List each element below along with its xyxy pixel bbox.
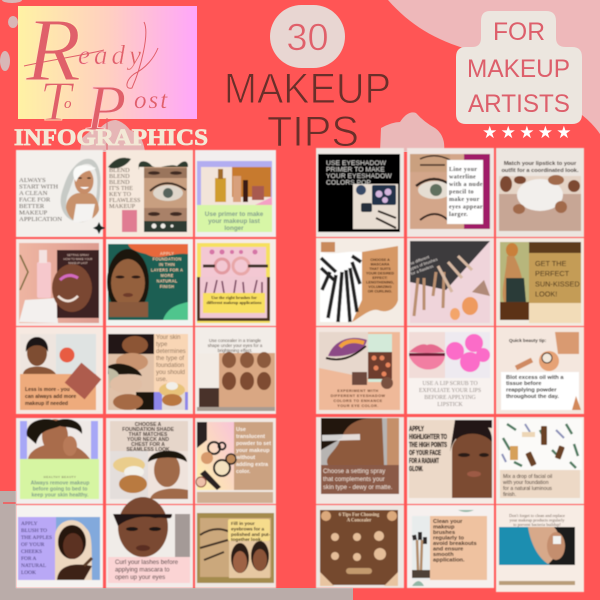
- text: CHOOSE A: [135, 422, 162, 428]
- text: BEFORE APPLYING: [424, 395, 476, 401]
- text: brushes: [433, 530, 455, 536]
- text: NATURAL: [21, 563, 46, 569]
- tip: concealer tips: [316, 505, 404, 588]
- text: LIPSTICK: [437, 402, 464, 408]
- rating stars: ★★★★★: [482, 123, 575, 143]
- text: CHOOSE A: [370, 258, 390, 262]
- text: APPLY: [409, 426, 424, 433]
- text: [156, 335, 186, 383]
- text: Curl your lashes before: [115, 559, 179, 566]
- text: Use primer to make: [205, 211, 264, 218]
- text: [409, 426, 447, 473]
- text: OF YOUR FACE: [409, 450, 441, 457]
- text: Use: [236, 427, 246, 433]
- text: [19, 177, 62, 223]
- text: color.: [236, 469, 251, 475]
- text: ALWAYS: [19, 177, 46, 184]
- text: throughout the day.: [506, 394, 559, 400]
- text: MORE: [160, 273, 174, 278]
- tip: setting spray type: [316, 417, 404, 504]
- text: A CLEAN: [19, 190, 48, 197]
- text: 6 Tips For Choosing: [339, 513, 380, 518]
- text: [31, 475, 89, 498]
- text: pencil to: [449, 190, 474, 196]
- text: APPLY: [21, 521, 38, 527]
- text: Use concealer in a triangle: [209, 338, 262, 343]
- text: outfit for a coordinated look.: [501, 168, 579, 174]
- text: [115, 559, 179, 581]
- text: the type of: [156, 356, 184, 362]
- text: SETTING SPRAY: [67, 253, 89, 257]
- tip: clean face: [16, 150, 105, 237]
- tip: lashes: [106, 497, 193, 588]
- text: BLEND: [109, 179, 130, 186]
- text: [331, 389, 385, 408]
- tip: clean brushes: [407, 505, 494, 588]
- text: FLAWLESS: [109, 197, 141, 204]
- text: OF YOUR: [21, 542, 45, 548]
- text: Quick beauty tip:: [509, 338, 547, 343]
- text: Choose a setting spray: [323, 468, 386, 475]
- text: before going to bed to: [33, 486, 87, 492]
- text: FOUNDATION SHADE: [122, 427, 175, 433]
- text: you should: [156, 370, 185, 376]
- text: your makeup products regularly: [509, 518, 565, 522]
- tip: sun-kissed: [496, 238, 584, 326]
- text: powder to set: [236, 441, 271, 447]
- text: to prevent bacteria buildup!: [513, 522, 561, 527]
- text: keep your skin healthy.: [32, 492, 89, 498]
- text: Clean your: [433, 519, 463, 525]
- tip: translucent powder: [195, 418, 276, 504]
- text: MAKEUP LAST: [68, 261, 88, 265]
- text: brightening effect.: [218, 348, 252, 353]
- text: eyebrows for a: [231, 526, 264, 532]
- tip: setting spray: [16, 239, 103, 326]
- script title: R: [25, 1, 81, 100]
- script title: eady: [78, 40, 145, 70]
- script title: P: [85, 72, 126, 145]
- tip: lip scrub: [407, 327, 494, 414]
- text: DIFFERENT EYESHADOW: [331, 394, 385, 398]
- text: [326, 160, 392, 186]
- text: Always remove makeup: [31, 480, 89, 486]
- text: [433, 519, 477, 564]
- text: for a flawless: [410, 263, 434, 276]
- text: Don't forget to clean and replace: [509, 513, 565, 518]
- text: [509, 513, 565, 527]
- tip: waterline: [407, 148, 494, 237]
- text: PRIMER TO MAKE: [326, 166, 385, 174]
- text: polished and put-: [231, 532, 270, 537]
- text: HIGHLIGHTER TO: [409, 434, 447, 441]
- text: determines: [156, 349, 186, 355]
- text: VOLUMIZING: [368, 285, 392, 289]
- text: FOUNDATION: [152, 256, 182, 262]
- script title: o: [64, 96, 72, 112]
- text: tissue before: [506, 381, 541, 387]
- text: Use different: [406, 254, 431, 267]
- text: YOUR NECK AND: [127, 437, 169, 443]
- text: Match your lipstick to your: [504, 161, 577, 167]
- text: finish.: [503, 492, 516, 498]
- text: SUN-KISSED: [535, 280, 580, 288]
- text: can always add more: [25, 394, 76, 400]
- text: THAT SUITS: [369, 267, 391, 271]
- badge: for makeup artists: [456, 11, 582, 124]
- text: LOOK: [21, 570, 36, 576]
- text: your makeup last: [208, 218, 261, 225]
- text: FOR A: [21, 556, 37, 562]
- text: APPLY: [160, 251, 174, 256]
- text: Your skin: [156, 335, 180, 341]
- text: NATURAL: [157, 278, 178, 284]
- text: [503, 474, 552, 498]
- text: SEAMLESS LOOK: [126, 447, 170, 453]
- decorative divider on band: [3, 502, 17, 504]
- text: [419, 381, 481, 408]
- text: shape under your eyes for a: [208, 343, 263, 348]
- title: makeup tips: TIPS: [267, 108, 359, 156]
- text: [205, 211, 264, 232]
- script flourishes: [24, 22, 158, 150]
- text: THE APPLES: [21, 535, 52, 541]
- text: types of brushes: [408, 257, 438, 272]
- tip: blush: [16, 505, 103, 588]
- text: larger.: [449, 212, 468, 218]
- text: your makeup: [236, 448, 270, 454]
- text: different makeup applications: [206, 300, 262, 305]
- text: use.: [156, 377, 168, 383]
- text: [122, 422, 175, 453]
- text: CHEST FOR A: [131, 442, 165, 448]
- text: [25, 387, 76, 407]
- text: [109, 167, 141, 210]
- tip: brush care: [406, 238, 494, 326]
- text: PERFECT: [535, 269, 570, 278]
- tip: thin layers: [106, 239, 193, 326]
- decorative blob under tips: [380, 112, 444, 152]
- text: [208, 338, 263, 353]
- text: GET THE: [535, 259, 566, 268]
- text: APPLICATION: [19, 216, 62, 223]
- text: [406, 252, 440, 276]
- text: MAKEUP: [19, 210, 48, 216]
- text: START WITH: [19, 184, 58, 190]
- text: eyes appear: [449, 204, 483, 210]
- text: together look.: [231, 537, 262, 542]
- text: for a natural luminous: [503, 486, 552, 492]
- text: [366, 258, 394, 294]
- text: regularly to: [433, 536, 464, 542]
- text: LENGTHENING,: [366, 280, 394, 284]
- text: LAYERS FOR A: [151, 268, 183, 272]
- text: IT'S THE: [109, 185, 133, 192]
- text: KEY TO: [109, 191, 132, 198]
- text: reapplying powder: [506, 388, 557, 394]
- text: Blot excess oil with a: [506, 375, 564, 381]
- text: Mix a drop of facial oil: [503, 474, 552, 480]
- text: make your: [449, 197, 480, 203]
- text: smooth: [433, 552, 454, 558]
- text: [506, 375, 564, 400]
- badge: for makeup artists: FOR: [493, 18, 545, 46]
- tip: lipstick: [496, 148, 584, 237]
- text: FACE FOR: [19, 196, 51, 204]
- text: [151, 251, 183, 289]
- text: EXFOLIATE YOUR LIPS: [419, 388, 481, 394]
- hero panel: ready to post: [18, 1, 197, 150]
- decorative top-left blobs: [0, 0, 22, 71]
- text: [235, 427, 271, 475]
- text: COLORS TO ENHANCE: [333, 399, 383, 403]
- tip: blend: [106, 150, 193, 237]
- text: and ensure: [433, 546, 463, 552]
- script title: ost: [134, 87, 169, 114]
- badge: 30: 30: [286, 17, 329, 59]
- text: waterline: [449, 174, 476, 180]
- text: YOUR EYESHADOW: [326, 173, 392, 180]
- tip: mascara: [316, 238, 404, 326]
- text: avoid breakouts: [433, 541, 477, 547]
- text: Fill in your: [231, 521, 255, 526]
- text: MAKEUP: [109, 203, 136, 210]
- text: USE A LIP SCRUB TO: [422, 381, 478, 387]
- text: HOW TO MAKE YOUR: [64, 257, 92, 261]
- text: HEALTHY BEAUTY: [44, 475, 76, 479]
- text: EXPERIMENT WITH: [337, 389, 379, 393]
- text: longer: [224, 225, 244, 232]
- text: OR CURLING.: [368, 290, 392, 294]
- text: translucent: [236, 434, 265, 440]
- left grid of tips: [16, 148, 584, 592]
- tip: eyeshadow primer: [316, 148, 404, 237]
- title: makeup tips: MAKEUP: [224, 65, 391, 113]
- tip: brushes: [195, 239, 276, 326]
- text: MASCARA: [371, 262, 390, 266]
- decorative top-right blob: [388, 0, 600, 134]
- text: type: [156, 342, 168, 348]
- text: YOUR EYE COLOR.: [337, 404, 379, 408]
- tip: clean products: [496, 505, 584, 592]
- text: [21, 521, 52, 576]
- tip: blot oil: [496, 327, 584, 414]
- text: YOUR DESIRED: [366, 272, 394, 276]
- text: IN THIN: [159, 262, 175, 267]
- text: BLEND: [109, 173, 130, 180]
- tip: facial oil: [496, 417, 584, 504]
- script title: T: [40, 71, 75, 133]
- text: BLUSH TO: [21, 528, 47, 534]
- text: [231, 521, 270, 542]
- tip: less is more: [16, 327, 103, 414]
- text: [323, 468, 393, 491]
- text: A Concealer: [347, 518, 371, 524]
- badge: 30: [270, 5, 345, 68]
- label: infographics: INFOGRAPHICS: [14, 125, 208, 150]
- text: application.: [433, 558, 465, 564]
- tip: eyeshadow: [316, 327, 404, 414]
- text: EFFECT:: [372, 276, 388, 280]
- text: Line your: [449, 167, 477, 173]
- text: makeup: [433, 524, 455, 530]
- text: with your foundation: [503, 480, 549, 486]
- text: THAT MATCHES: [129, 432, 168, 438]
- text: [339, 513, 380, 524]
- text: [449, 167, 483, 218]
- text: [535, 259, 580, 298]
- script title: [25, 1, 169, 145]
- text: COLORS POP: [326, 180, 371, 186]
- text: [206, 295, 262, 305]
- tip: concealer: [195, 327, 276, 414]
- text: LOOK!: [535, 290, 557, 298]
- text: applying mascara to: [115, 566, 170, 574]
- tip: skin type: [106, 327, 193, 414]
- text: adding extra: [236, 462, 269, 468]
- text: FINISH: [160, 284, 174, 289]
- text: BETTER: [19, 203, 45, 210]
- text: [501, 161, 579, 174]
- text: open up your eyes: [115, 574, 165, 581]
- text: with a nude: [449, 182, 483, 188]
- decorative bottom band: [0, 491, 353, 600]
- text: that complements your: [323, 476, 385, 483]
- text: [64, 253, 92, 265]
- text: FOR A RADIANT: [409, 458, 439, 465]
- text: BLEND: [109, 167, 130, 174]
- text: USE EYESHADOW: [326, 160, 387, 167]
- text: Use the right brushes for: [211, 295, 257, 300]
- text: makeup if needed: [25, 401, 68, 407]
- badge: for makeup artists: ARTISTS: [468, 90, 570, 118]
- text: Less is more - you: [25, 387, 70, 393]
- text: without: [235, 455, 255, 461]
- tip: eyebrows: [195, 505, 276, 588]
- text: THE HIGH POINTS: [409, 442, 447, 449]
- badge: for makeup artists: MAKEUP: [467, 55, 570, 83]
- tip: foundation shade: [106, 418, 193, 504]
- text: skin type - dewy or matte.: [323, 484, 393, 491]
- tip: primer: [195, 150, 276, 237]
- text: CHEEKS: [21, 549, 42, 555]
- text: foundation: [156, 363, 184, 369]
- tip: highlighter: [407, 417, 494, 504]
- tip: remove makeup: [16, 418, 103, 504]
- text: GLOW.: [409, 466, 423, 473]
- decorative blob behind infographics label: [80, 120, 145, 152]
- title: makeup tips: [224, 65, 391, 156]
